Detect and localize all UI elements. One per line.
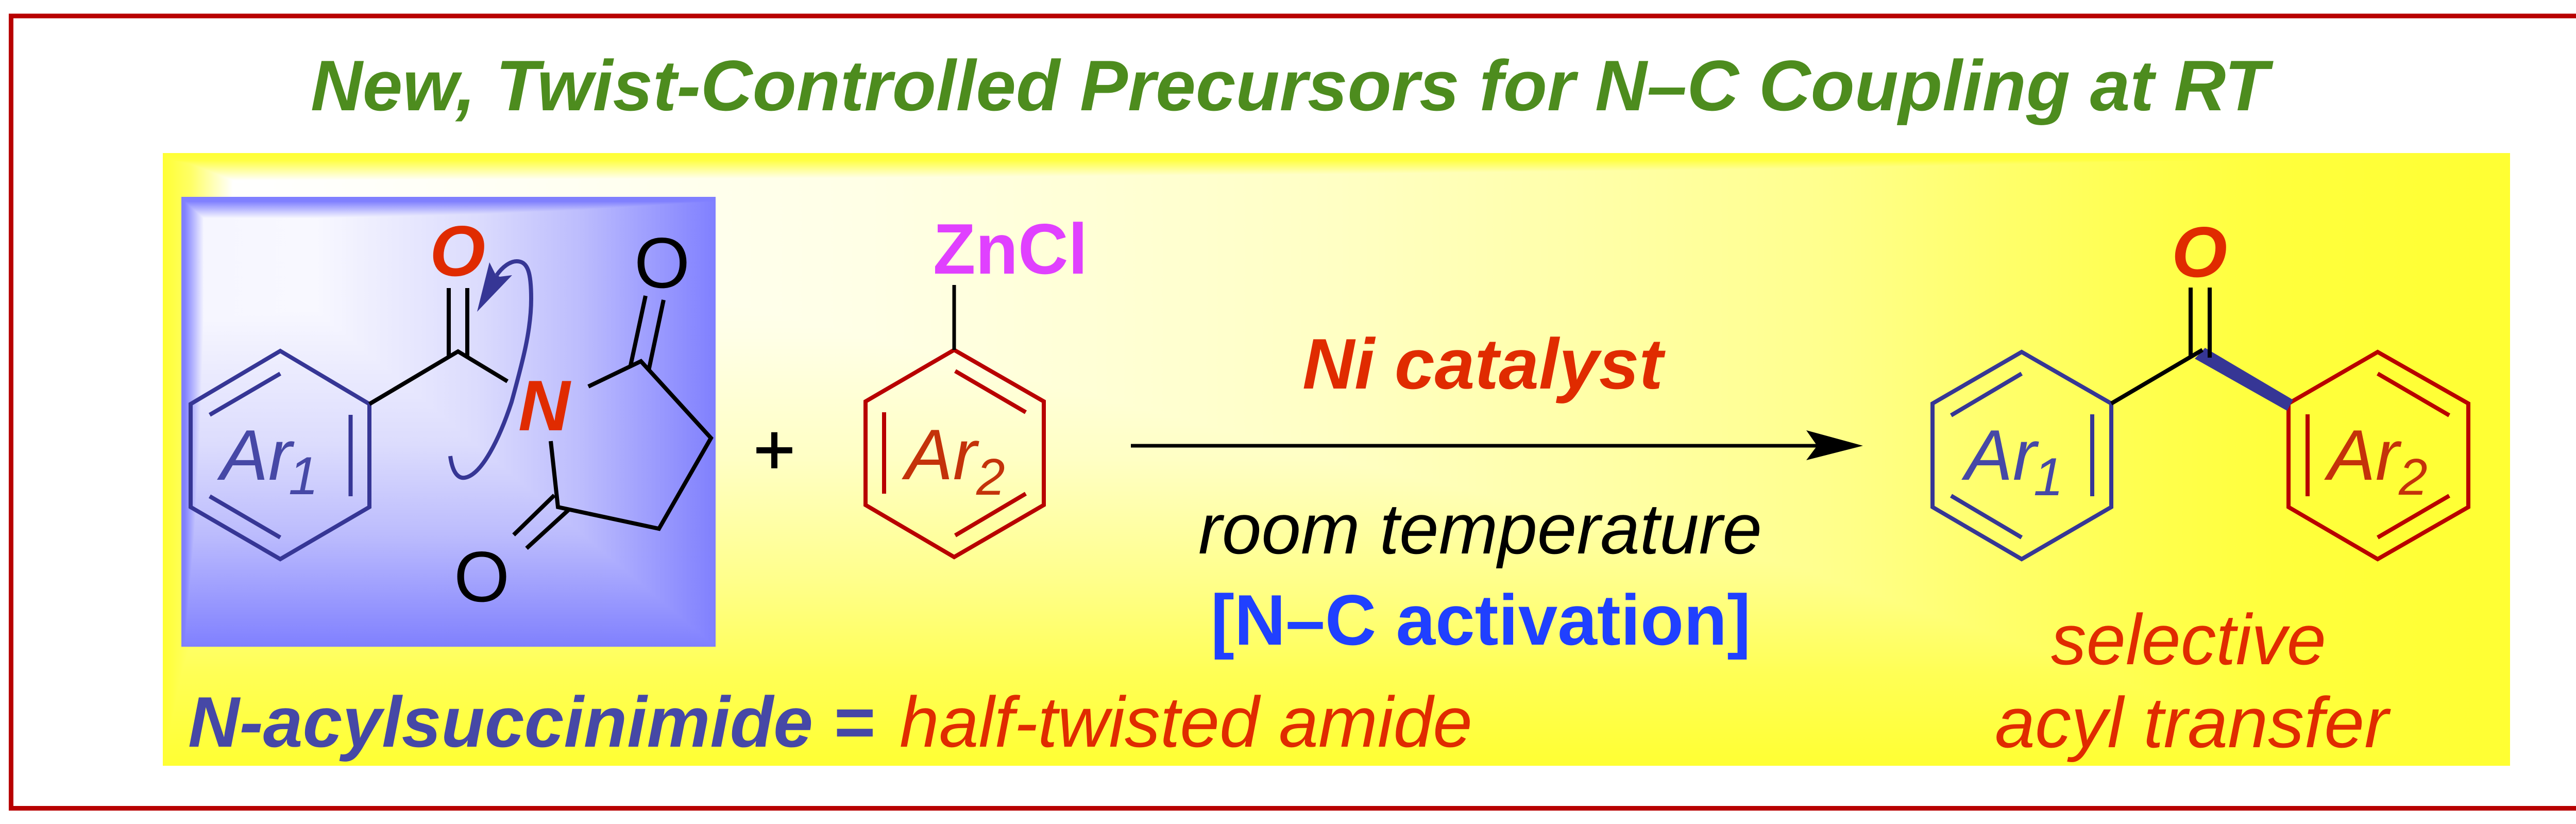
- label: Ar1: [1961, 415, 2063, 507]
- ring: Ar1 benzene: [1933, 352, 2111, 559]
- molecule: N-acylsuccinimide: [191, 211, 711, 617]
- title: New, Twist-Controlled Precursors for N–C Coupling at RT: [311, 46, 2274, 126]
- panel: yellow reaction background: [163, 153, 2510, 766]
- bond: aryl-carbonyl: [2111, 350, 2202, 403]
- label: Ar2: [2324, 415, 2428, 506]
- atom: nitrogen: N: [518, 366, 571, 446]
- label: ZnCl: ZnCl: [933, 209, 1088, 289]
- reagent: Ni catalyst: Ni catalyst: [1302, 324, 1666, 404]
- label: Ar2: 2: [976, 448, 1005, 506]
- plus sign: +: [753, 410, 795, 490]
- caption: selective acyl transfer: acyl transfer: [1995, 683, 2391, 763]
- reaction arrow: [1131, 430, 1863, 460]
- ring: Ar1 benzene: [191, 351, 369, 559]
- ring: Ar2 benzene: [2289, 352, 2468, 559]
- label: Ar2: Ar: [902, 415, 979, 495]
- label: Ar1: 1: [2033, 447, 2063, 507]
- molecule: aryl zinc chloride: [866, 209, 1088, 557]
- caption: N-acylsuccinimide =: N-acylsuccinimide =: [188, 682, 874, 762]
- molecule: diaryl ketone product: [1933, 212, 2468, 559]
- label: N-C activation: [N–C activation]: [1211, 580, 1751, 660]
- bond: C=O: [2191, 288, 2210, 358]
- label: Ar2: Ar: [2324, 415, 2402, 495]
- label: Ar1: Ar: [217, 415, 295, 495]
- panel: purple N-acylsuccinimide box: [181, 197, 716, 647]
- atom: carbonyl oxygen: O: [430, 211, 485, 291]
- bond: C-Zn: [952, 285, 956, 350]
- condition: room temperature: room temperature: [1198, 489, 1762, 569]
- bond: new wedge C-C: [2195, 348, 2293, 411]
- ring: Ar2 benzene: [866, 350, 1044, 557]
- label: Ar1: [217, 415, 318, 506]
- caption: selective acyl transfer: selective: [2051, 600, 2326, 680]
- label: Ar1: Ar: [1961, 415, 2039, 495]
- atom: upper imide oxygen: O: [634, 223, 690, 303]
- caption: selective acyl transfer: [1995, 600, 2391, 763]
- atom: lower imide oxygen: O: [454, 537, 510, 617]
- label: Ar2: [902, 415, 1005, 506]
- atom: product oxygen: O: [2172, 212, 2227, 292]
- curved twist arrow: [450, 261, 531, 478]
- label: Ar2: 2: [2398, 448, 2428, 506]
- caption: half-twisted amide: half-twisted amide: [900, 682, 1472, 762]
- bonds: carbonyl and succinimide: [369, 288, 711, 548]
- label: Ar1: 1: [289, 446, 318, 506]
